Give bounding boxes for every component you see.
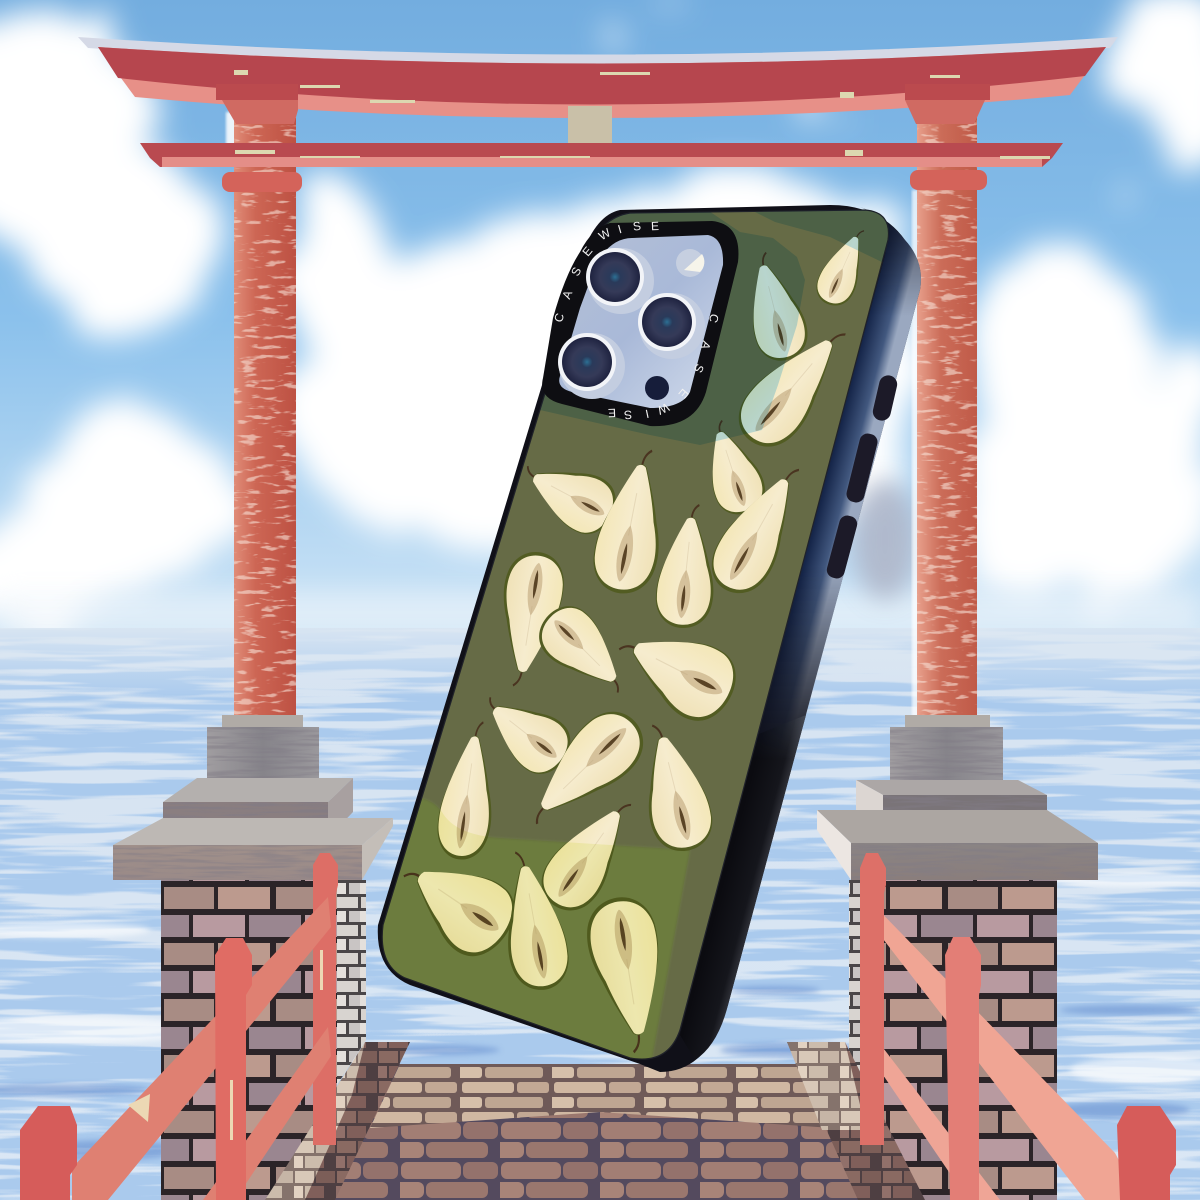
sky background <box>0 0 1200 640</box>
top beam <box>78 37 1118 118</box>
right pillar <box>912 100 977 720</box>
pillar caps <box>216 84 990 124</box>
CASEWISE lettering: E <box>608 406 616 420</box>
CASEWISE lettering: S <box>632 219 642 234</box>
black camera ring <box>542 221 738 426</box>
CASEWISE lettering <box>551 219 722 422</box>
left railing <box>20 853 338 1200</box>
upper rail <box>72 897 331 1200</box>
lower rail <box>203 1027 331 1200</box>
pear 4 <box>694 414 771 521</box>
CASEWISE lettering: E <box>651 219 659 233</box>
pear 14 <box>628 717 719 858</box>
CASEWISE lettering: I <box>644 407 650 421</box>
pear 15 <box>433 718 505 863</box>
pillar rings <box>222 170 987 192</box>
pear 13 <box>511 699 657 842</box>
middle post <box>945 937 981 1200</box>
pear 19 <box>581 892 675 1057</box>
pear 6 <box>587 444 678 599</box>
middle post <box>215 938 252 1200</box>
translucent side lower <box>680 715 806 1060</box>
CASEWISE lettering: S <box>568 265 584 278</box>
upper rail <box>866 898 1140 1200</box>
side buttons <box>825 374 899 580</box>
CASEWISE lettering: W <box>655 400 671 418</box>
left stone base <box>113 715 393 880</box>
phone case <box>370 200 921 1072</box>
front post <box>20 1106 77 1200</box>
olive back panel <box>370 200 900 1070</box>
lens 1 <box>586 248 654 314</box>
pear 3 <box>726 311 865 460</box>
CASEWISE lettering: A <box>559 288 575 301</box>
panel reflections <box>370 205 892 1070</box>
CASEWISE lettering: E <box>579 244 595 259</box>
silver camera plate <box>559 235 723 408</box>
camera island <box>542 219 738 426</box>
flash <box>676 249 704 277</box>
pear 2 <box>736 247 813 366</box>
right stone base <box>817 715 1098 880</box>
right curb <box>787 1042 925 1200</box>
rear post <box>860 853 886 1145</box>
lens 2 <box>638 293 705 359</box>
CASEWISE lettering: A <box>698 339 714 351</box>
CASEWISE lettering: S <box>691 362 707 375</box>
left curb <box>265 1042 410 1200</box>
CASEWISE lettering: W <box>596 225 614 243</box>
pear 7 <box>653 501 723 631</box>
clouds <box>0 0 1200 635</box>
CASEWISE lettering: C <box>706 312 722 325</box>
pear 18 <box>492 846 574 995</box>
lens 3 <box>558 333 625 399</box>
pear 16 <box>530 785 651 922</box>
case body <box>378 205 921 1072</box>
torii gate <box>78 37 1118 720</box>
sea <box>0 628 1200 1200</box>
CASEWISE lettering: I <box>616 222 623 236</box>
pear 9 <box>489 548 569 691</box>
translucent side upper <box>762 207 921 750</box>
pear 1 <box>810 222 878 312</box>
lower rail <box>866 1027 1000 1200</box>
pear 8 <box>700 453 820 604</box>
right railing <box>860 853 1176 1200</box>
pear 17 <box>386 837 527 969</box>
back panel edge <box>382 210 889 1059</box>
CASEWISE lettering: S <box>623 407 633 422</box>
CASEWISE lettering: E <box>676 386 692 401</box>
front post <box>1117 1106 1176 1200</box>
brick pillars <box>161 880 1057 1200</box>
second beam <box>140 143 1063 167</box>
pear 5 <box>511 445 625 543</box>
stone walkway <box>265 1042 925 1200</box>
center strut <box>568 106 612 144</box>
rear post <box>313 853 338 1145</box>
pear 11 <box>605 609 747 732</box>
CASEWISE lettering: C <box>551 311 567 324</box>
pear 10 <box>528 595 642 709</box>
left pillar <box>226 100 296 720</box>
pear 12 <box>469 679 581 784</box>
lidar sensor <box>645 376 669 400</box>
